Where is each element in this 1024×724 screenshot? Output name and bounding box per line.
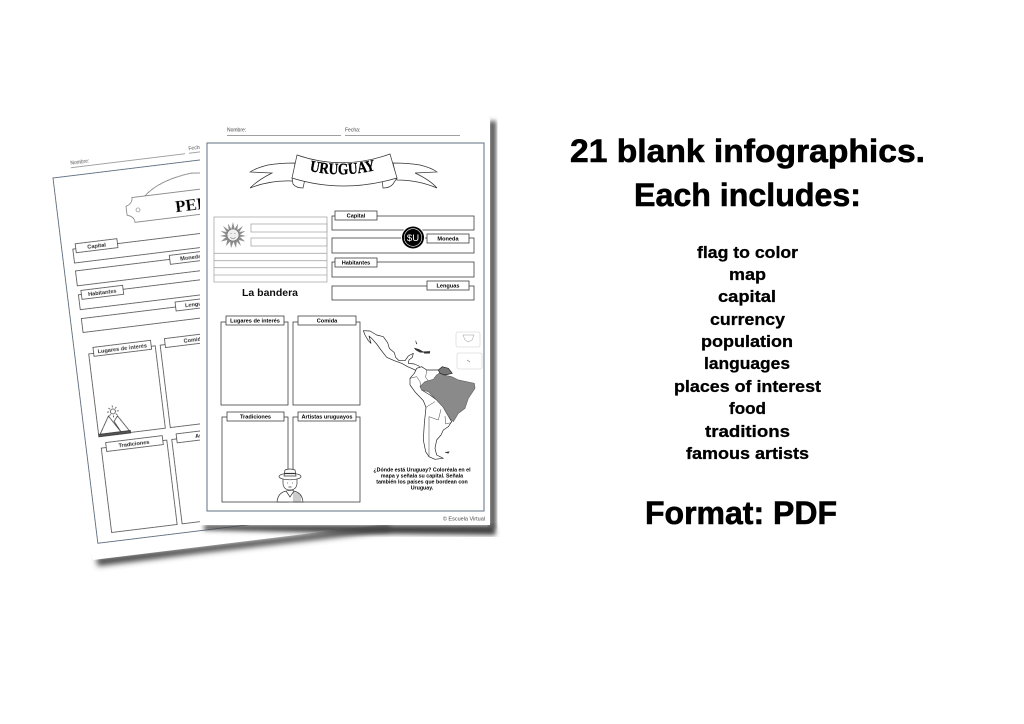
list of included items: languages [704,354,790,373]
back panel: lugares de interes [88,340,165,436]
back info field: moneda [75,250,218,286]
info field: habitantes: Habitantes [342,260,370,266]
back info field: habitantes: Habitantes [88,289,117,298]
list of included items: currency [710,310,786,329]
map of Latin America [363,331,475,459]
list of included items [674,243,821,463]
info field: lenguas: Lenguas [436,284,460,290]
back panel: comida [159,331,237,428]
panel: lugares de interes: Lugares de interés [230,318,280,324]
format note: Format: PDF [645,495,837,531]
info field: moneda [332,234,474,253]
front worksheet: Uruguay [200,118,490,525]
info field: capital: Capital [347,214,366,220]
name and date fields: Fecha: [345,128,360,134]
list of included items: map [729,265,766,284]
front page shadow [204,121,496,535]
South America outline [410,367,452,459]
back info field: lenguas [81,296,224,332]
title ribbon [249,154,438,188]
info field: capital [332,211,474,230]
panel: comida [293,316,360,405]
back panel: tradiciones: Tradiciones [118,440,150,449]
icon: currency coin [401,226,425,250]
back frame [53,144,373,543]
Guianas highlighted [438,367,452,375]
panel: comida: Comida [317,318,338,324]
back worksheet: Peru [43,119,381,560]
worksheet frame [207,143,484,511]
back info field: lenguas: Lenguas [185,301,208,309]
list of included items: famous artists [686,444,809,463]
heading: 21 blank infographics. [570,133,925,169]
title ribbon: URUGUAY [311,160,374,175]
icon: man with hat [277,469,303,502]
back info field: capital [72,227,215,263]
heading: Each includes: [634,177,861,213]
map instructions: mapa y señala su capital. Señala [381,474,463,480]
back title plaque: PERÚ [174,192,222,216]
Mexico and Central America [363,331,427,374]
icon: mountains and sun [95,404,131,437]
map instructions [373,468,471,492]
copyright: © Escuela Virtual [443,516,485,522]
panel: tradiciones: Tradiciones [240,414,271,420]
back title plaque [123,165,264,223]
Caribbean islands [414,341,430,353]
icon: sun of May [220,222,246,248]
list of included items: food [729,399,766,418]
list of included items: population [701,332,793,351]
list of included items: flag to color [697,243,798,262]
back panel: artistas [171,426,249,524]
info field: lenguas [332,281,474,300]
back info field: habitantes [78,273,221,310]
country borders [410,370,451,457]
heading [570,133,925,213]
Falkland Islands [445,452,449,453]
back name and date fields [70,132,303,168]
name and date fields: Nombre: [227,128,246,134]
panel: tradiciones [222,412,288,502]
back panel: tradiciones [101,435,177,532]
panel: artistas uruguayos [293,412,360,502]
panel: lugares de interes [221,316,288,405]
map instructions: también los países que bordean con [376,480,468,486]
list of included items: places of interest [674,377,821,396]
back info field: moneda: Moneda [180,254,203,263]
back name and date fields: Fecha: [188,144,204,152]
back panel: comida: Comida [183,336,205,345]
info field: habitantes [332,258,474,277]
back name and date fields: Nombre: [70,158,90,167]
back panel: lugares de interes: Lugares de interés [97,343,147,355]
list of included items: capital [718,287,776,306]
map instructions: ¿Dónde está Uruguay? Coloréala en el [373,468,471,474]
panel: artistas uruguayos: Artistas uruguayos [302,414,352,420]
map inset: Spain [456,332,480,347]
back page shadow [96,525,390,566]
info field: moneda: Moneda [437,236,459,242]
back info field: capital: Capital [87,243,107,251]
front page sheet [200,118,490,525]
back panel: artistas: Artistas [195,432,216,440]
back page sheet [43,119,381,560]
Brazil highlighted [420,373,475,422]
map instructions: Uruguay. [411,486,434,492]
name and date fields [227,128,460,136]
map inset: islands [457,353,482,369]
flag caption: La bandera [242,287,298,299]
flag to color [214,217,327,282]
list of included items: traditions [705,422,790,441]
icon: currency coin: $U [407,233,419,244]
